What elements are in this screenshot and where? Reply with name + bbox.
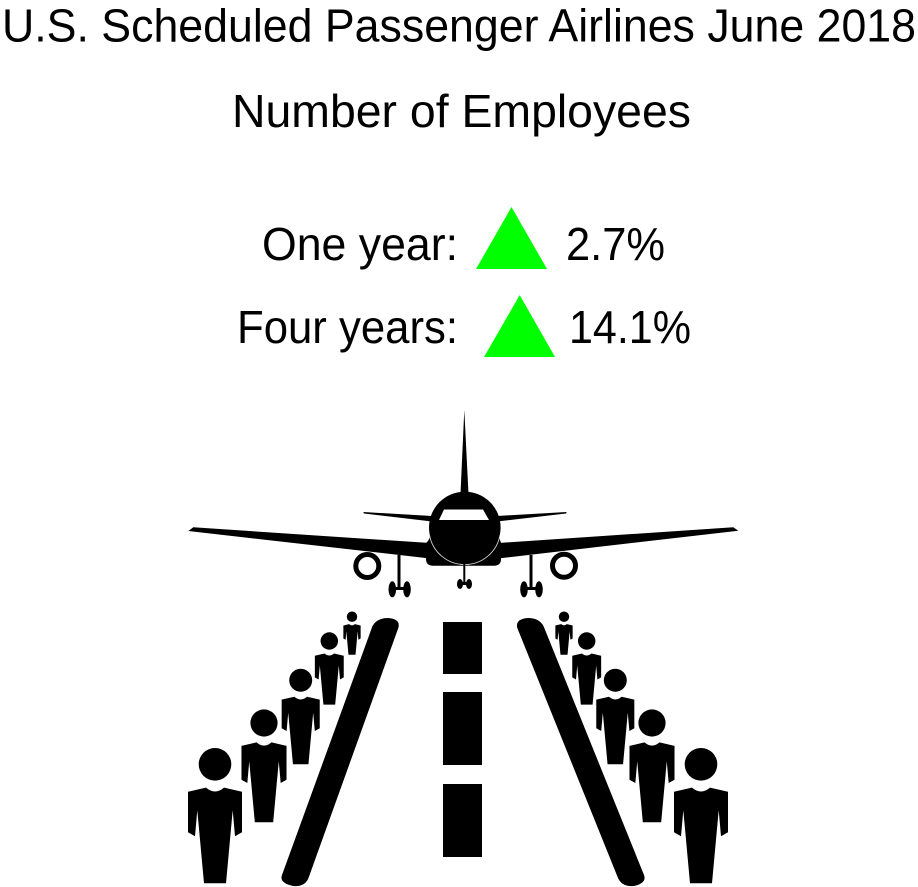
icon: airplane front view bbox=[188, 410, 738, 597]
fuselage bbox=[429, 492, 501, 563]
left landing gear bbox=[388, 555, 411, 597]
subtitle: Number of Employees bbox=[232, 85, 691, 137]
right landing gear bbox=[520, 555, 543, 597]
belly bbox=[426, 535, 501, 566]
four years value: 14.1% bbox=[569, 301, 691, 353]
fuselage highlight arc bbox=[430, 535, 500, 565]
wings bbox=[188, 527, 738, 558]
icon: green up triangle four years bbox=[484, 295, 555, 357]
left engine bbox=[356, 554, 379, 578]
runway left edge bbox=[281, 618, 399, 886]
four year change bbox=[237, 295, 691, 357]
runway bbox=[281, 618, 645, 886]
people left column bbox=[188, 611, 361, 883]
nose gear bbox=[457, 563, 472, 589]
one year value: 2.7% bbox=[566, 218, 665, 270]
one year label: One year: bbox=[262, 218, 458, 270]
right engine bbox=[552, 554, 576, 577]
cockpit window bbox=[439, 510, 489, 520]
tail fin bbox=[460, 410, 468, 494]
horizontal stabilizers bbox=[363, 512, 567, 522]
one year change bbox=[262, 207, 665, 270]
runway right edge bbox=[517, 618, 645, 886]
icon: green up triangle one year bbox=[476, 207, 547, 269]
people right column bbox=[555, 611, 728, 883]
four years label: Four years: bbox=[237, 301, 458, 353]
runway center dashes bbox=[443, 622, 482, 857]
